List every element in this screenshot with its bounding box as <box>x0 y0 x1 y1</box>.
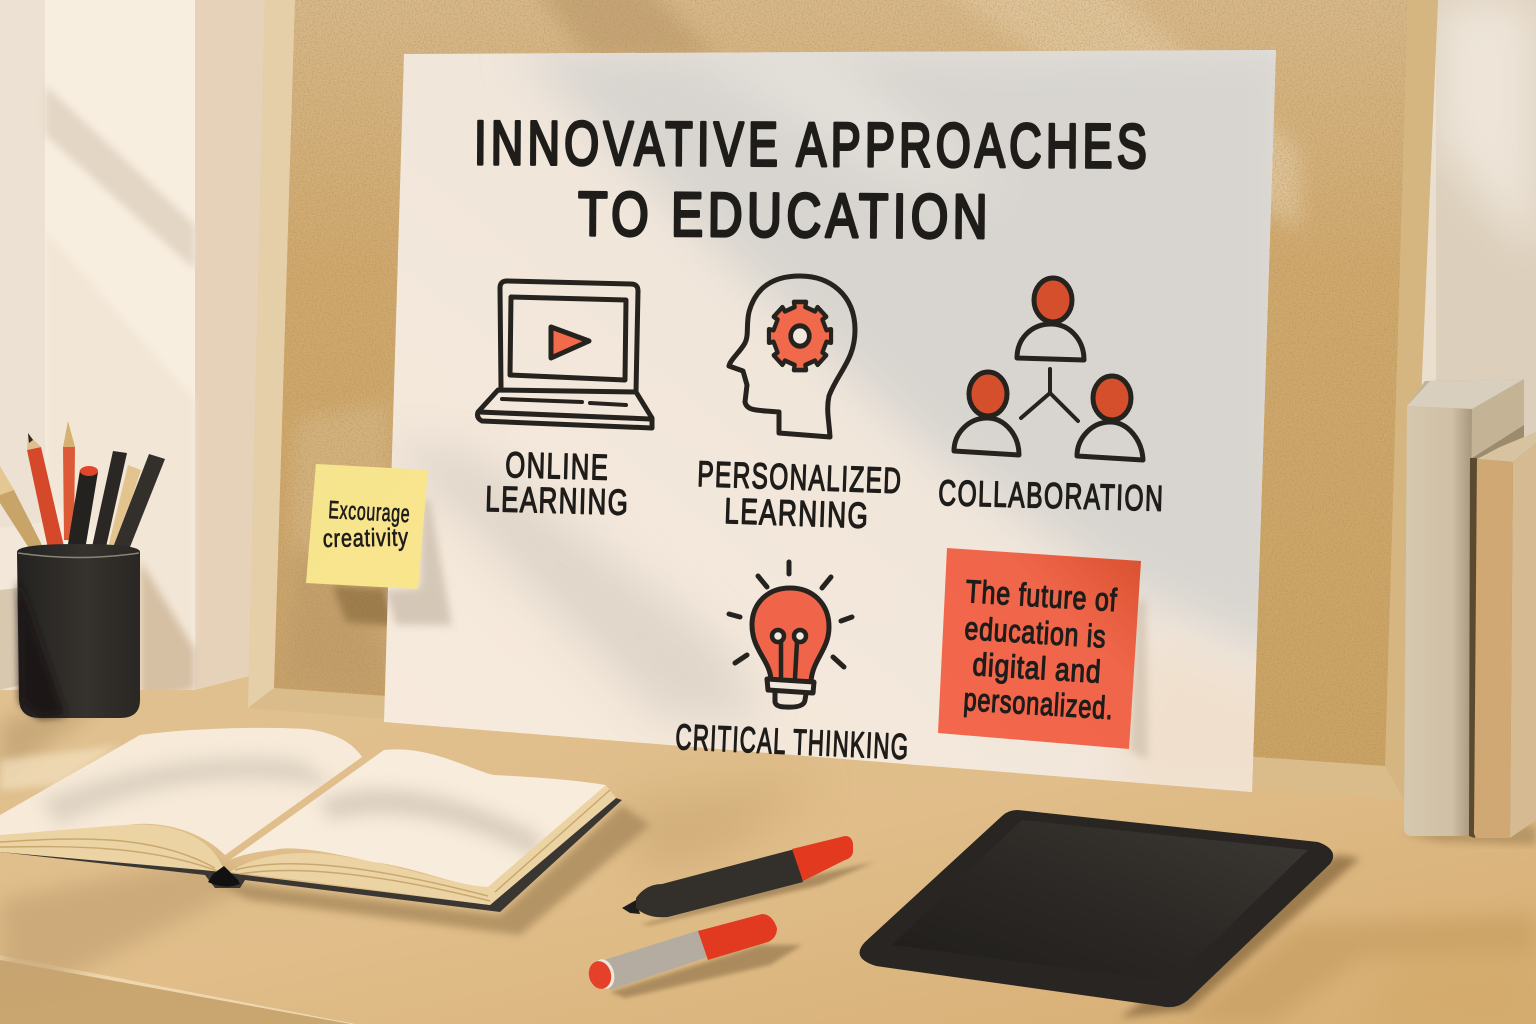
wall background <box>0 0 1536 690</box>
sticky note: the future of education <box>938 548 1141 749</box>
title: INNOVATIVE APPROACHES <box>474 109 1151 182</box>
icon: head with gear <box>729 276 855 437</box>
sticky note: encourage creativity <box>306 464 428 589</box>
silver marker with red cap <box>586 914 777 991</box>
sticky note: encourage creativity: Excourage <box>328 496 411 528</box>
open notebook <box>0 728 622 912</box>
icon: three collaborating people <box>954 278 1143 460</box>
sticky note: the future of education: The future of <box>965 573 1118 618</box>
label: online learning <box>485 444 630 523</box>
red pencil <box>27 433 66 558</box>
title: TO EDUCATION <box>578 180 992 252</box>
label: collaboration: COLLABORATION <box>938 472 1165 519</box>
corkboard with wooden frame <box>248 0 1438 800</box>
note shadow: yellow sticky <box>385 500 452 625</box>
pencil holder with pens <box>0 421 165 718</box>
label: critical thinking: CRITICAL THINKING <box>675 716 910 767</box>
black pen <box>90 451 127 556</box>
poster sheet <box>380 45 1290 800</box>
black marker <box>622 836 853 917</box>
poster sunlight shadow: upper right <box>520 45 1290 660</box>
window sill <box>0 522 45 590</box>
title <box>474 109 1151 252</box>
sticky note: the future of education: digital and <box>972 646 1103 690</box>
sticky note: encourage creativity: creativity <box>323 524 409 553</box>
tablet <box>860 810 1333 1007</box>
icon: light bulb <box>729 562 852 707</box>
cup <box>17 544 140 718</box>
black marker with red top <box>66 466 98 556</box>
thin red pencil <box>63 421 75 540</box>
icon: laptop with play button <box>478 281 652 428</box>
sticky note: the future of education: personalized. <box>963 681 1114 726</box>
label: personalized learning: PERSONALIZED <box>697 453 903 501</box>
sticky note: the future of education: education is <box>964 610 1108 655</box>
black pen right <box>112 454 165 552</box>
stacked books <box>1404 379 1536 838</box>
label: personalized learning <box>697 453 903 536</box>
tan pencil <box>106 465 141 556</box>
wooden pencil <box>0 466 46 556</box>
label: online learning: ONLINE <box>505 444 610 488</box>
label: personalized learning: LEARNING <box>724 490 870 536</box>
label: online learning: LEARNING <box>485 478 630 523</box>
wooden desk <box>0 676 1536 1024</box>
note shadow: red sticky <box>950 600 1148 760</box>
